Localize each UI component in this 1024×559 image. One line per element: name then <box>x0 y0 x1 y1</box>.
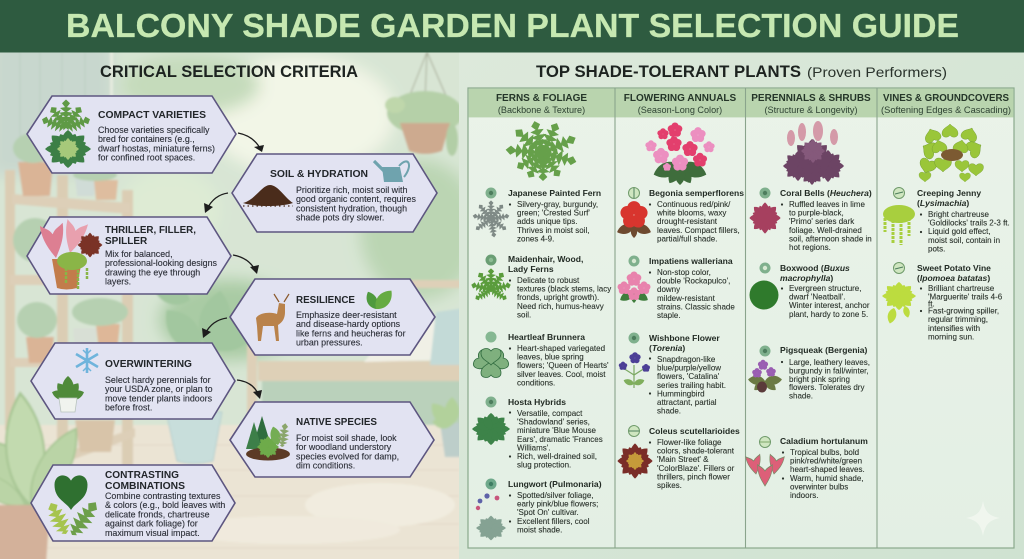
name: Caladium hortulanum <box>780 436 868 446</box>
arrow <box>207 193 228 209</box>
arrowhead <box>254 145 264 152</box>
details: colors, shade-tolerant <box>657 447 735 456</box>
illustration: impatiens bouquet <box>645 122 715 186</box>
name: Japanese Painted Fern <box>508 188 601 198</box>
details: silver leaves. Cool, moist <box>517 370 606 379</box>
details: soil. <box>517 310 531 319</box>
bullet <box>649 203 651 206</box>
details: Winter interest, anchor <box>789 301 870 310</box>
icon: woodland <box>246 416 291 460</box>
icon <box>750 280 778 310</box>
description: Select hardy perennials for <box>105 375 211 385</box>
badge <box>486 254 496 266</box>
details: staple. <box>657 311 681 320</box>
arrowhead <box>202 328 211 338</box>
icon <box>883 205 915 245</box>
name: Coral Bells (Heuchera) <box>780 188 872 198</box>
badge <box>486 188 496 198</box>
icon <box>476 493 506 540</box>
arrowhead <box>250 265 259 274</box>
shelf <box>5 133 135 470</box>
icon <box>618 271 650 304</box>
description: for confined root spaces. <box>98 153 195 163</box>
description: For moist soil shade, look <box>296 433 397 443</box>
name: Wishbone Flower <box>649 333 720 343</box>
details: white blooms, waxy <box>656 209 726 218</box>
badge <box>760 262 770 274</box>
column header: ferns <box>496 93 587 115</box>
blue bucket planter <box>166 412 222 464</box>
details: Brilliant chartreuse <box>928 284 995 293</box>
arrow <box>205 318 227 334</box>
bullet <box>649 271 651 274</box>
description: Emphasize deer-resistant <box>296 310 397 320</box>
details: flowers; 'Queen of Hearts' <box>517 361 609 370</box>
details: foliage. Well-drained <box>789 226 862 235</box>
bullets <box>509 496 511 522</box>
badge <box>628 256 640 266</box>
name: Heartleaf Brunnera <box>508 332 585 342</box>
name: Maidenhair, Wood, <box>508 254 583 264</box>
description: professional-looking designs <box>105 258 218 268</box>
column header: vines: VINES & GROUNDCOVERS <box>883 93 1009 104</box>
arrow <box>237 380 259 396</box>
large potted plant <box>0 392 105 559</box>
details: conditions. <box>517 378 555 387</box>
card: thriller, filler, spiller <box>27 217 231 294</box>
column header: perennials: (Structure & Longevity) <box>764 105 858 115</box>
description: Choose varieties specifically <box>98 125 210 135</box>
icon <box>617 443 653 479</box>
name: Buxus <box>824 263 850 273</box>
bullet <box>509 347 511 350</box>
plant: creeping jenny <box>883 188 1010 253</box>
details: 'ColorBlaze'. Fillers or <box>657 464 735 473</box>
details: spikes. <box>657 481 682 490</box>
heading: COMPACT VARIETIES <box>98 110 206 121</box>
details: 'Goldilocks' trails 2-3 ft. <box>928 219 1010 228</box>
details: Rich, well-drained soil, <box>517 452 597 461</box>
description: consistent hydration, though <box>296 203 407 213</box>
details: pots. <box>928 244 945 253</box>
details: attractant, partial <box>657 398 717 407</box>
name: Creeping Jenny <box>917 188 981 198</box>
details: dwarf 'Neatball'. <box>789 293 845 302</box>
icon: fern and hosta <box>40 100 92 168</box>
bullet <box>781 361 783 363</box>
icon <box>748 360 782 393</box>
arrow <box>233 255 256 272</box>
details: regular trimming, <box>928 315 988 324</box>
plant: lungwort <box>476 478 602 540</box>
table frame and column headers <box>468 88 1014 548</box>
hanging basket <box>385 52 463 156</box>
bullets <box>782 452 784 478</box>
icon: mixed pot <box>40 219 102 290</box>
badge <box>894 262 904 274</box>
name: Pigsqueak (Bergenia) <box>780 345 868 355</box>
icon: potted plant <box>50 376 86 412</box>
bullet <box>509 279 511 282</box>
description: Prioritize rich, moist soil with <box>296 185 408 195</box>
details: leaves, blue spring <box>517 353 584 362</box>
bullet <box>781 287 783 290</box>
details: Silvery-gray, burgundy, <box>517 200 598 209</box>
name: ( <box>917 198 920 208</box>
details: flowers. Tolerates dry <box>789 383 864 392</box>
plant: boxwood <box>750 262 870 319</box>
icon: leaves <box>363 287 396 313</box>
plant: maidenhair, wood, lady ferns <box>470 254 611 319</box>
description: Mix for balanced, <box>105 249 173 259</box>
details: textures (black stems, lacy <box>517 285 611 294</box>
card: resilience <box>230 279 435 355</box>
name: Ipomoea batatas) <box>920 273 990 283</box>
details: Excellent fillers, cool <box>517 517 590 526</box>
description: move tender plants indoors <box>105 393 213 403</box>
icon <box>746 454 784 486</box>
title banner <box>0 0 1024 52</box>
arrowhead <box>253 390 262 399</box>
details: Non-stop color, <box>657 268 711 277</box>
details: Snapdragon-like <box>657 355 716 364</box>
description: layers. <box>105 277 131 287</box>
name: macrophylla <box>780 273 831 283</box>
badge <box>486 478 496 490</box>
details: Tropical bulbs, bold <box>790 448 859 457</box>
icon: soil mound <box>243 185 293 206</box>
plant: pigsqueak <box>748 345 870 401</box>
details: early pink/blue flowers; <box>517 500 598 509</box>
details: ft. <box>928 300 935 309</box>
central foliage <box>149 276 267 361</box>
description: good organic content, requires <box>296 194 416 204</box>
details: mildew-resistant <box>657 294 716 303</box>
column header: vines <box>881 93 1011 115</box>
plant: heartleaf brunnera <box>472 332 609 387</box>
badge <box>894 188 904 198</box>
heading line 2: SPILLER <box>105 236 148 247</box>
details: Ears', dramatic 'Frances <box>517 435 603 444</box>
details: 'Primo' series dark <box>789 217 855 226</box>
heading: CONTRASTING <box>105 470 179 481</box>
card: native species <box>230 402 434 477</box>
details: Continuous red/pink/ <box>657 200 731 209</box>
details: bright pink spring <box>789 375 850 384</box>
plant: caladium <box>746 436 868 500</box>
details: hot regions. <box>789 243 831 252</box>
plant: coleus <box>617 426 740 490</box>
description: drawing the eye through <box>105 267 200 277</box>
icon <box>619 352 650 388</box>
icon <box>472 348 510 377</box>
badge <box>628 426 640 436</box>
icon: snowflake <box>76 348 98 373</box>
name: ( <box>649 343 652 353</box>
description: and disease-hardy options <box>296 319 401 329</box>
name: ) <box>830 273 833 283</box>
details: adds unique tips. <box>517 217 578 226</box>
details: miniature 'Blue Mouse <box>517 426 596 435</box>
details: indoors. <box>790 491 818 500</box>
details: series trailing habit. <box>657 381 726 390</box>
details: Need rich, humus-heavy <box>517 302 604 311</box>
details: Spotted/silver foliage, <box>517 491 594 500</box>
name: Hosta Hybrids <box>508 397 566 407</box>
icon <box>749 202 781 234</box>
details: morning sun. <box>928 332 974 341</box>
card: compact varieties <box>27 96 236 173</box>
column header: ferns: FERNS & FOLIAGE <box>496 93 587 104</box>
plant: begonia <box>615 188 744 243</box>
details: partial/full shade. <box>657 234 717 243</box>
details: Warm, humid shade, <box>790 474 864 483</box>
column header: ferns: (Backbone & Texture) <box>498 105 585 115</box>
name: Begonia semperflorens <box>649 188 744 198</box>
details: leaves. Compact fillers, <box>657 226 740 235</box>
right panel background <box>459 52 1024 559</box>
details: pink/red/white/green <box>790 457 862 466</box>
details: moist shade. <box>517 525 562 534</box>
heading: top shade-tolerant plants <box>536 63 947 81</box>
description: shade pots dry slower. <box>296 213 384 223</box>
description: dwarf hostas, miniature ferns) <box>98 143 215 153</box>
card: overwintering <box>31 343 235 419</box>
small potted plant right <box>426 397 465 457</box>
icon <box>470 268 512 303</box>
details: Large, leathery leaves, <box>789 358 870 367</box>
details: Liquid gold effect, <box>928 227 991 236</box>
details: Bright chartreuse <box>928 210 989 219</box>
plant: wishbone flower <box>619 332 726 416</box>
details: plant, hardy to zone 5. <box>789 310 868 319</box>
details: 'Shadowland' series, <box>517 418 590 427</box>
name: Coleus scutellarioides <box>649 426 740 436</box>
description: like ferns and heucheras for <box>296 328 406 338</box>
details: flowers, 'Catalina' <box>657 372 720 381</box>
card: soil and hydration <box>232 154 437 232</box>
details: 'Main Street' & <box>657 455 709 464</box>
badge <box>486 332 496 342</box>
bullet <box>509 203 511 206</box>
left panel: balcony garden background scene <box>0 40 480 559</box>
description: maximum visual impact. <box>105 528 200 538</box>
card: contrasting combinations <box>31 465 235 541</box>
bullet <box>781 203 783 206</box>
icon <box>615 201 653 238</box>
plant: hosta hybrids <box>472 396 603 470</box>
details: Versatile, compact <box>517 409 583 418</box>
icon <box>472 413 510 445</box>
badge <box>760 188 770 198</box>
name: Boxwood ( <box>780 263 824 273</box>
badge <box>628 188 640 198</box>
details: shade. <box>657 407 681 416</box>
details: zones 4-9. <box>517 234 554 243</box>
column header: annuals <box>624 93 737 115</box>
details: fronds, upright growth). <box>517 293 599 302</box>
description: dim conditions. <box>296 461 355 471</box>
column header: annuals: (Season-Long Color) <box>638 105 722 115</box>
details: Hummingbird <box>657 389 705 398</box>
icon: deer <box>256 294 289 341</box>
heading: critical selection criteria: CRITICAL SELECTION CRITERIA <box>100 63 358 81</box>
icon: heart leaf and fronds <box>43 475 103 541</box>
column header: perennials <box>751 93 871 115</box>
name: Sweet Potato Vine <box>917 263 991 273</box>
icon <box>882 282 916 325</box>
details: Ruffled leaves in lime <box>789 200 865 209</box>
bullets <box>509 412 511 456</box>
heading: OVERWINTERING <box>105 359 192 370</box>
description: species evolved for damp, <box>296 451 399 461</box>
badge <box>760 346 770 356</box>
details: Thrives in moist soil, <box>517 226 589 235</box>
arrowhead <box>204 203 213 213</box>
heading: top shade-tolerant plants: (Proven Performers) <box>807 64 947 80</box>
icon: watering can <box>374 161 409 182</box>
details: moist soil, contain in <box>928 236 1000 245</box>
details: overwinter bulbs <box>790 482 848 491</box>
details: soil, afternoon shade in <box>789 234 872 243</box>
description: against dark foliage) for <box>105 519 198 529</box>
details: downy <box>657 285 680 294</box>
details: Flower-like foliage <box>657 438 722 447</box>
illustration: heuchera <box>783 121 844 185</box>
details: heart-shaped leaves. <box>790 465 865 474</box>
description: your USDA zone, or plan to <box>105 384 213 394</box>
details: Williams'. <box>517 443 551 452</box>
details: Delicate to robust <box>517 276 580 285</box>
name: Lungwort (Pulmonaria) <box>508 479 602 489</box>
details: to purple-black, <box>789 209 844 218</box>
details: green; 'Crested Surf' <box>517 209 590 218</box>
name: Torenia) <box>652 343 685 353</box>
description: urban pressures. <box>296 338 363 348</box>
description: before frost. <box>105 403 152 413</box>
arrow <box>238 133 261 150</box>
illustration: large fern <box>505 119 579 182</box>
badge <box>760 436 770 448</box>
details: slug protection. <box>517 461 571 470</box>
details: 'Spot On' cultivar. <box>517 508 579 517</box>
illustration: vine in hanging pot <box>917 124 985 182</box>
plant: sweet potato vine <box>882 262 1003 341</box>
title: BALCONY SHADE GARDEN PLANT SELECTION GUIDE <box>66 7 959 44</box>
bullet <box>649 441 651 444</box>
description: for woodland understory <box>296 442 392 452</box>
details: 'Marguerite' trails 4-6 <box>928 293 1003 302</box>
heading: top shade-tolerant plants: TOP SHADE-TOLERANT PLANTS <box>536 63 801 81</box>
name: Lady Ferns <box>508 264 554 274</box>
details: drought-resistant <box>657 217 718 226</box>
description: bred for containers (e.g., <box>98 134 195 144</box>
details: double 'Rockapulco', <box>657 277 730 286</box>
details: blue/purple/yellow <box>657 364 721 373</box>
badge <box>486 396 496 408</box>
plant: coral bells <box>749 188 872 252</box>
details: thrillers, pinch flower <box>657 472 730 481</box>
sparkle watermark <box>966 501 1000 536</box>
details: shade. <box>789 392 813 401</box>
bullets <box>920 288 922 311</box>
heading line 2: COMBINATIONS <box>105 481 185 492</box>
heading: NATIVE SPECIES <box>296 417 377 428</box>
heading: SOIL & HYDRATION <box>270 169 368 180</box>
details: burgundy in fall/winter, <box>789 366 869 375</box>
plant: japanese painted fern <box>472 188 601 243</box>
details: strains. Classic shade <box>657 302 735 311</box>
column header: annuals: FLOWERING ANNUALS <box>624 93 737 104</box>
column header: perennials: PERENNIALS & SHRUBS <box>751 93 871 104</box>
description: delicate fronds, chartreuse <box>105 509 210 519</box>
column header: vines: (Softening Edges & Cascading) <box>881 105 1011 115</box>
badge <box>628 332 640 344</box>
plant: impatiens <box>618 256 735 320</box>
description: Combine contrasting textures <box>105 491 221 501</box>
details: Heart-shaped variegated <box>517 344 605 353</box>
name: Lysimachia) <box>920 198 969 208</box>
bullets <box>649 358 651 394</box>
heading: RESILIENCE <box>296 295 355 306</box>
icon <box>472 200 510 238</box>
bullets <box>920 214 922 232</box>
bench with cushions <box>247 280 465 430</box>
name: ( <box>917 273 920 283</box>
description: & colors (e.g., bold leaves with <box>105 500 225 510</box>
name: Impatiens walleriana <box>649 256 733 266</box>
details: Fast-growing spiller, <box>928 307 999 316</box>
details: Evergreen structure, <box>789 284 861 293</box>
heading: THRILLER, FILLER, <box>105 225 196 236</box>
details: intensifies with <box>928 324 980 333</box>
